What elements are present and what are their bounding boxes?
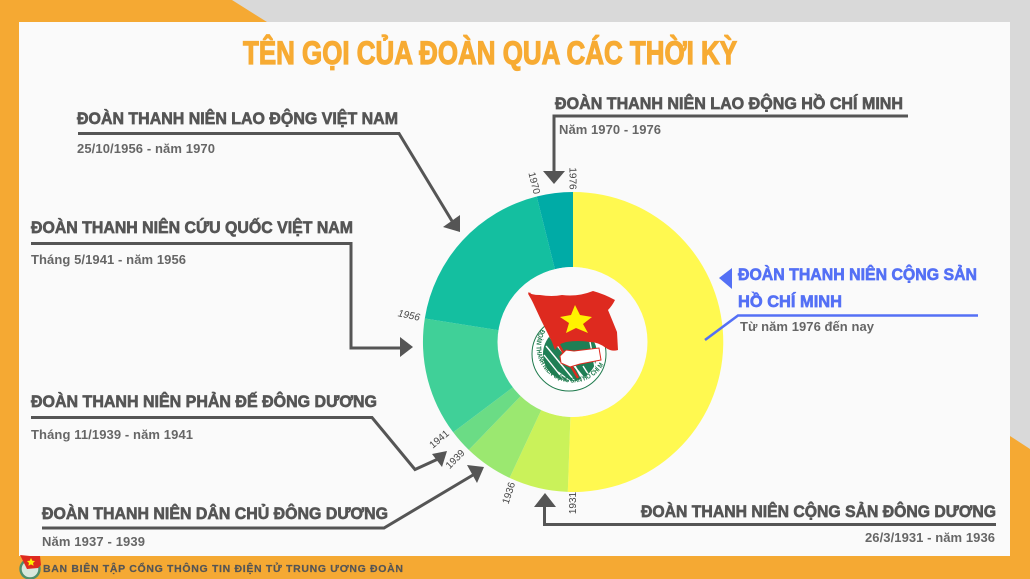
emblem green disc [543,327,597,381]
heading: ĐOÀN THANH NIÊN CỨU QUỐC VIỆT NAM [31,217,353,237]
leader line [554,116,908,172]
segment: 1939 to 1941 [453,387,521,450]
emblem lettering: ĐOÀN THANH NIÊN CỘNG SẢN HỒ CHÍ MINH [536,329,604,383]
callout: Đoàn TN Lao động Việt Nam [77,109,460,232]
mini logo star [27,558,35,566]
heading line one: ĐOÀN THANH NIÊN CỘNG SẢN [738,265,977,284]
segment: 1970 to 1976 [537,192,573,269]
year 1976: 1976 [566,167,578,190]
arrowhead [400,337,413,357]
leader line [544,505,996,524]
arrowhead [467,465,484,483]
callout: Đoàn TN Dân chủ Đông Dương [42,465,484,549]
heading: ĐOÀN THANH NIÊN CỘNG SẢN ĐÔNG DƯƠNG [641,502,996,521]
arrowhead [432,451,447,467]
year 1941: 1941 [428,428,452,451]
logo background circle [498,267,648,417]
callout: Đoàn TN Phản đế Đông Dương [31,392,447,470]
segment: 1941 to 1956 [423,318,513,432]
segment: 1931 to 1936 [510,410,570,492]
dates: Tháng 11/1939 - năm 1941 [31,427,193,442]
dates: Từ năm 1976 đến nay [740,319,875,334]
year 1956: 1956 [397,308,421,324]
donut chart [423,192,723,492]
year 1931: 1931 [568,491,579,514]
arrowhead [443,215,460,232]
footer credit [20,555,403,578]
heading: ĐOÀN THANH NIÊN LAO ĐỘNG VIỆT NAM [77,109,398,128]
arrowhead [534,493,556,507]
year 1939: 1939 [444,448,468,471]
emblem pole [529,293,578,378]
mini logo ring [20,560,40,578]
mini logo flag [20,555,41,569]
dates: Năm 1937 - 1939 [42,534,145,549]
logo: Youth Union emblem [498,267,648,417]
year 1936: 1936 [501,481,518,506]
footer mini logo [20,555,41,578]
callout: Đoàn TN Cộng sản Đông Dương [534,493,996,545]
segment: 1976 to present [568,192,723,492]
heading: ĐOÀN THANH NIÊN DÂN CHỦ ĐÔNG DƯƠNG [42,504,388,523]
callout: Đoàn TN Cộng sản Hồ Chí Minh [705,265,978,340]
dates: 25/10/1956 - năm 1970 [77,141,215,156]
background: grey corner [232,0,1030,449]
callout: Đoàn TN Cứu quốc Việt Nam [31,217,413,357]
emblem arm and fist [560,348,601,367]
footer text: BAN BIÊN TẬP CỔNG THÔNG TIN ĐIỆN TỬ TRUNG ƯƠNG ĐOÀN [43,562,403,575]
dates: 26/3/1931 - năm 1936 [865,530,995,545]
leader line [42,475,473,528]
arrowhead [543,171,565,184]
leader line [78,134,452,221]
leader line [31,244,401,348]
heading line two: HỒ CHÍ MINH [738,292,842,311]
leader line [705,316,978,340]
segment: 1956 to 1970 [425,196,555,330]
arrowhead [719,268,732,289]
leader line [31,418,438,470]
emblem ring [532,317,606,391]
dates: Năm 1970 - 1976 [559,122,661,137]
title: TÊN GỌI CỦA ĐOÀN QUA CÁC THỜI KỲ [243,35,737,71]
year 1970: 1970 [526,171,542,196]
dates: Tháng 5/1941 - năm 1956 [31,252,186,267]
callout: Đoàn TN Lao động Hồ Chí Minh [543,94,908,184]
heading: ĐOÀN THANH NIÊN PHẢN ĐẾ ĐÔNG DƯƠNG [31,392,377,411]
emblem flag [528,291,618,351]
heading: ĐOÀN THANH NIÊN LAO ĐỘNG HỒ CHÍ MINH [555,94,903,113]
emblem star [560,305,592,333]
segment: 1937 to 1939 [469,396,541,478]
emblem stripes [544,337,596,381]
year labels [397,167,579,514]
